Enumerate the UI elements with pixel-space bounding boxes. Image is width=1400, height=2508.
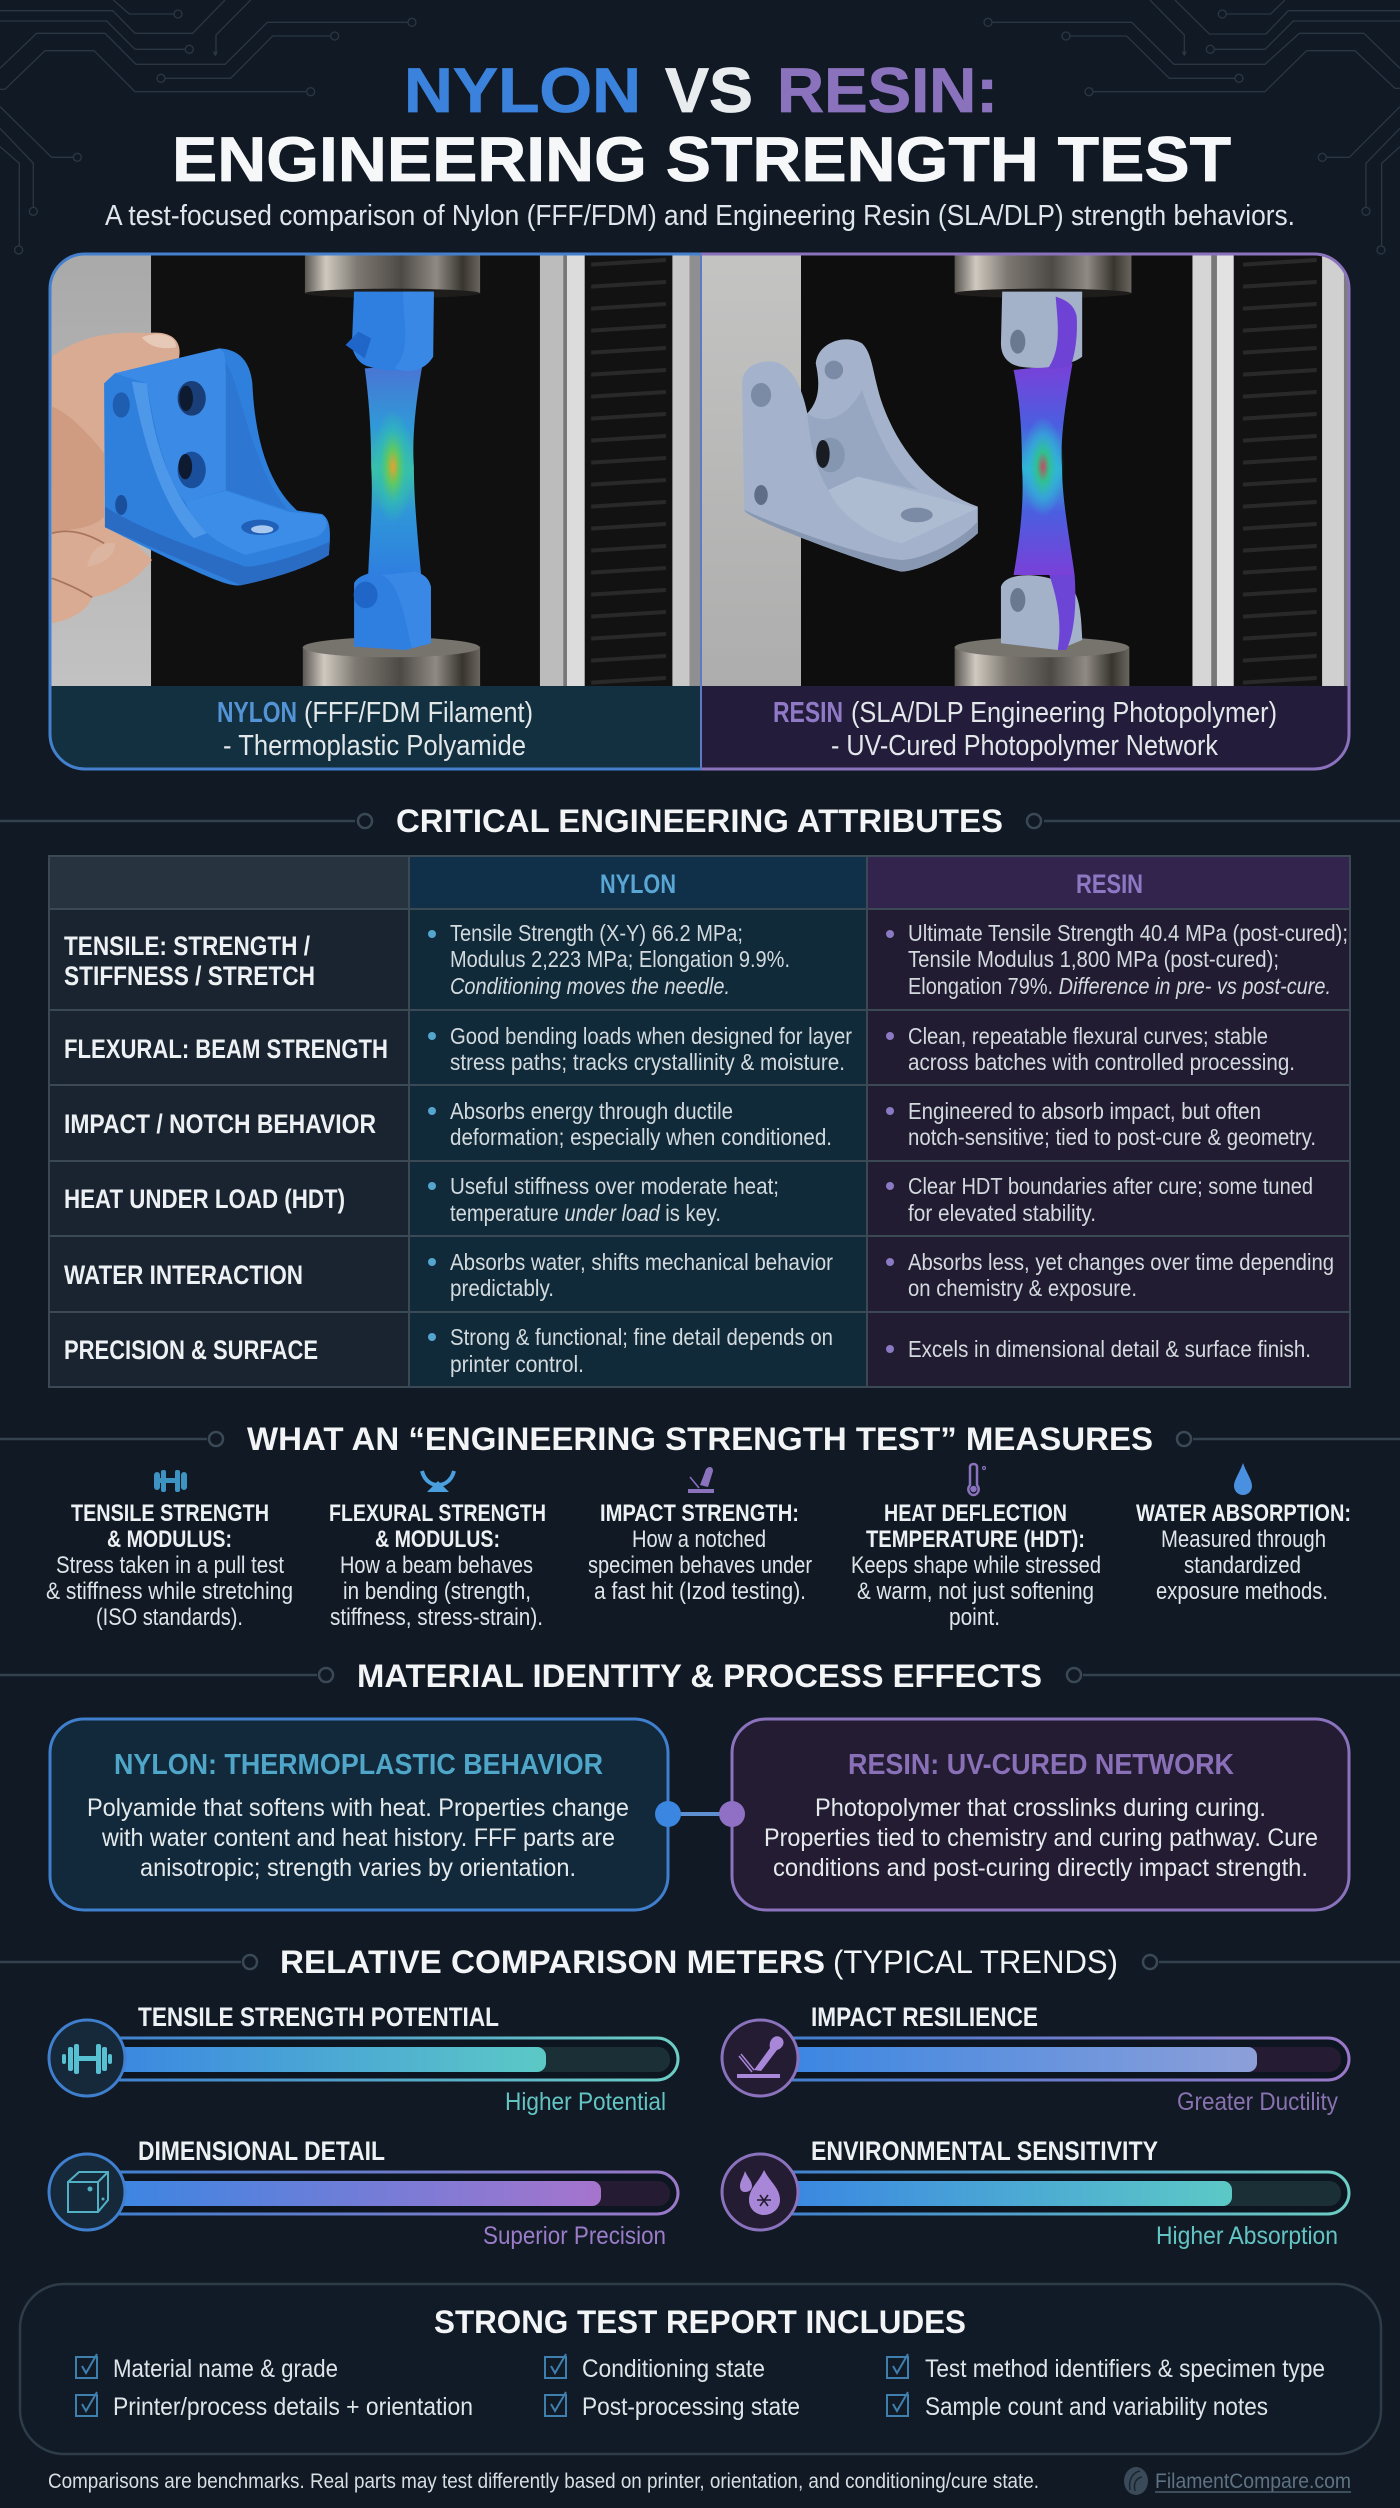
measure: flexural strength: in bending (strength,: [343, 1578, 531, 1605]
card: resin network: RESIN: UV-CURED NETWORK: [848, 1749, 1234, 1781]
panel outline: [50, 254, 1349, 769]
row: precision: PRECISION & SURFACE: [64, 1335, 318, 1365]
meter: dimensional detail: DIMENSIONAL DETAIL: [138, 2136, 385, 2166]
meter: environmental sensitivity: [722, 2136, 1349, 2250]
checklist: column 2: Conditioning state: [582, 2355, 765, 2383]
measure: flexural strength: & MODULUS:: [375, 1526, 500, 1553]
row: heat: [64, 1173, 1313, 1226]
measure: impact strength: [588, 1467, 812, 1605]
measure: water absorption: Measured through: [1161, 1526, 1326, 1553]
title: NYLON: [404, 56, 641, 126]
caption: resin: RESIN: [773, 697, 843, 729]
footer brand: [1124, 2467, 1351, 2495]
icon: water drop: [1234, 1463, 1252, 1495]
panel: strong test report: [20, 2284, 1381, 2454]
heading: material identity: [0, 1658, 1400, 1694]
row: precision: Strong & functional; fine detail depends on: [450, 1324, 833, 1350]
measure: heat deflection temperature: Keeps shape while stressed: [851, 1552, 1101, 1579]
checklist: column 3: [887, 2354, 1325, 2421]
caption: nylon: (FFF/FDM Filament): [304, 697, 533, 729]
measure: tensile strength: TENSILE STRENGTH: [71, 1500, 269, 1527]
row: flexural: Good bending loads when designed for layer: [450, 1023, 852, 1049]
meter: tensile strength potential: [49, 2002, 678, 2116]
meter: dimensional detail: [49, 2136, 678, 2250]
row: tensile: Tensile Modulus 1,800 MPa (post-cured);: [908, 946, 1279, 972]
caption: nylon: NYLON: [217, 697, 297, 729]
row: impact: deformation; especially when conditioned.: [450, 1124, 832, 1150]
row: flexural: FLEXURAL: BEAM STRENGTH: [64, 1034, 388, 1064]
meter: environmental sensitivity: ENVIRONMENTAL SENSITIVITY: [811, 2136, 1158, 2166]
measure: water absorption: standardized: [1184, 1552, 1301, 1579]
measure: tensile strength: (ISO standards).: [96, 1604, 243, 1631]
row: heat: Clear HDT boundaries after cure; some tuned: [908, 1173, 1313, 1199]
measure: flexural strength: How a beam behaves: [340, 1552, 533, 1579]
row: heat: HEAT UNDER LOAD (HDT): [64, 1184, 345, 1214]
measure: heat deflection temperature: [851, 1464, 1101, 1631]
row: tensile: Elongation 79%. Difference in pre- vs post-cure.: [908, 973, 1331, 999]
row: tensile: Modulus 2,223 MPa; Elongation 9.9%.: [450, 946, 790, 972]
caption: nylon: [217, 697, 533, 762]
row: flexural: [64, 1023, 1295, 1075]
caption: resin: - UV-Cured Photopolymer Network: [831, 730, 1218, 762]
row: impact: IMPACT / NOTCH BEHAVIOR: [64, 1109, 376, 1139]
row: flexural: stress paths; tracks crystallinity & moisture.: [450, 1049, 845, 1075]
photo: resin bracket and tensile specimen: [700, 250, 1352, 687]
meter: impact resilience: Greater Ductility: [1177, 2088, 1338, 2116]
card: nylon behavior: NYLON: THERMOPLASTIC BEHAVIOR: [114, 1749, 603, 1781]
measure: flexural strength: [329, 1471, 546, 1631]
circuit traces: top left: [0, 0, 416, 254]
measure: tensile strength: [46, 1470, 293, 1631]
measure: tensile strength: & stiffness while stretching: [46, 1578, 293, 1605]
row: precision: Excels in dimensional detail & surface finish.: [908, 1336, 1311, 1362]
row: water: Absorbs water, shifts mechanical behavior: [450, 1249, 833, 1275]
icon: impact hammer: [688, 1467, 714, 1493]
row: precision: [64, 1324, 1311, 1377]
panel: strong test report: STRONG TEST REPORT INCLUDES: [434, 2304, 966, 2340]
icon: dumbbell arrow: [154, 1470, 187, 1492]
card: resin network: conditions and post-curing directly impact strength.: [773, 1854, 1308, 1882]
meter: tensile strength potential: TENSILE STRENGTH POTENTIAL: [138, 2002, 499, 2032]
icon: cube: [49, 2154, 125, 2230]
caption backgrounds: [49, 686, 1350, 770]
measure: impact strength: IMPACT STRENGTH:: [600, 1500, 799, 1527]
measure: heat deflection temperature: TEMPERATURE (HDT):: [866, 1526, 1085, 1553]
card: resin network: Photopolymer that crosslinks during curing.: [815, 1794, 1266, 1822]
row: tensile: TENSILE: STRENGTH /: [64, 931, 310, 961]
measure: impact strength: How a notched: [632, 1526, 766, 1553]
measure: flexural strength: stiffness, stress-strain).: [330, 1604, 543, 1631]
icon: dumbbell: [49, 2020, 125, 2096]
row: precision: printer control.: [450, 1351, 584, 1377]
heading: relative comparison meters: [0, 1944, 1400, 1980]
meter: environmental sensitivity: Higher Absorption: [1156, 2222, 1338, 2250]
photo: nylon bracket and tensile specimen: [40, 250, 702, 687]
caption: resin: [773, 697, 1277, 762]
row: water: on chemistry & exposure.: [908, 1275, 1137, 1301]
heading: critical engineering attributes: CRITICAL ENGINEERING ATTRIBUTES: [396, 803, 1003, 839]
checklist: column 1: [76, 2354, 473, 2421]
caption: resin: (SLA/DLP Engineering Photopolymer): [851, 697, 1277, 729]
measure: tensile strength: Stress taken in a pull test: [56, 1552, 284, 1579]
card: nylon behavior: anisotropic; strength varies by orientation.: [140, 1854, 576, 1882]
caption: nylon: - Thermoplastic Polyamide: [223, 730, 526, 762]
panel: material photos: [40, 250, 1352, 770]
card: nylon behavior: with water content and heat history. FFF parts are: [101, 1824, 615, 1852]
table: engineering attributes: [49, 856, 1350, 1387]
table header: nylon: NYLON: [600, 869, 676, 899]
row: impact: Engineered to absorb impact, but often: [908, 1098, 1261, 1124]
checklist: column 1: Printer/process details + orientation: [113, 2393, 473, 2421]
meter: impact resilience: [722, 2002, 1349, 2116]
circuit traces: top right: [984, 0, 1400, 254]
heading: relative comparison meters: RELATIVE COMPARISON METERS: [280, 1944, 825, 1980]
table header: resin: RESIN: [1076, 869, 1143, 899]
row: water: [64, 1249, 1334, 1301]
measure: water absorption: WATER ABSORPTION:: [1136, 1500, 1351, 1527]
row: tensile: Conditioning moves the needle.: [450, 973, 730, 999]
card: nylon behavior: [50, 1719, 668, 1910]
row: flexural: Clean, repeatable flexural curves; stable: [908, 1023, 1268, 1049]
icon: beam bend: [422, 1471, 454, 1492]
row: heat: for elevated stability.: [908, 1200, 1096, 1226]
row: impact: [64, 1098, 1316, 1150]
row: flexural: across batches with controlled processing.: [908, 1049, 1295, 1075]
heading: critical engineering attributes: [0, 803, 1400, 839]
card: resin network: Properties tied to chemistry and curing pathway. Cure: [764, 1824, 1318, 1852]
measure: heat deflection temperature: & warm, not just softening: [857, 1578, 1094, 1605]
heading: what the test measures: [0, 1421, 1400, 1457]
row: impact: notch-sensitive; tied to post-cure & geometry.: [908, 1124, 1316, 1150]
row: heat: temperature under load is key.: [450, 1200, 721, 1226]
footer disclaimer: Comparisons are benchmarks. Real parts may test differently based on printer, orientation, and conditioning/cure state.: [48, 2470, 1039, 2493]
title: VS: [665, 56, 753, 126]
measure: impact strength: a fast hit (Izod testing).: [594, 1578, 806, 1605]
meter: impact resilience: IMPACT RESILIENCE: [811, 2002, 1038, 2032]
measure: water absorption: [1136, 1463, 1351, 1605]
row: impact: Absorbs energy through ductile: [450, 1098, 733, 1124]
connector between cards: [655, 1801, 745, 1827]
measure: water absorption: exposure methods.: [1156, 1578, 1328, 1605]
title: ENGINEERING STRENGTH TEST: [172, 125, 1231, 195]
row: heat: Useful stiffness over moderate heat;: [450, 1173, 779, 1199]
card: resin network: [732, 1719, 1349, 1910]
checklist: column 3: Test method identifiers & specimen type: [925, 2355, 1325, 2383]
row: tensile: Tensile Strength (X-Y) 66.2 MPa;: [450, 920, 743, 946]
heading: what the test measures: WHAT AN “ENGINEERING STRENGTH TEST” MEASURES: [247, 1421, 1153, 1457]
measure: tensile strength: & MODULUS:: [107, 1526, 232, 1553]
row: water: WATER INTERACTION: [64, 1260, 303, 1290]
checklist: column 2: [545, 2354, 800, 2421]
meter: tensile strength potential: Higher Potential: [505, 2088, 666, 2116]
measure: flexural strength: FLEXURAL STRENGTH: [329, 1500, 546, 1527]
card: nylon behavior: Polyamide that softens with heat. Properties change: [87, 1794, 629, 1822]
checklist: column 3: Sample count and variability notes: [925, 2393, 1268, 2421]
icon: impact hammer: [722, 2020, 798, 2096]
subtitle: A test-focused comparison of Nylon (FFF/FDM) and Engineering Resin (SLA/DLP) strength behaviors.: [105, 200, 1295, 232]
footer brand: FilamentCompare.com: [1155, 2470, 1351, 2493]
row: water: predictably.: [450, 1275, 554, 1301]
icon: water drops: [722, 2154, 798, 2230]
heading: material identity: MATERIAL IDENTITY & PROCESS EFFECTS: [357, 1658, 1042, 1694]
measure: heat deflection temperature: HEAT DEFLECTION: [884, 1500, 1067, 1527]
title: RESIN:: [777, 56, 998, 126]
heading: relative comparison meters: (TYPICAL TRENDS): [833, 1944, 1118, 1980]
meter: dimensional detail: Superior Precision: [483, 2222, 666, 2250]
row: tensile: STIFFNESS / STRETCH: [64, 961, 315, 991]
measure: heat deflection temperature: point.: [949, 1604, 1000, 1631]
icon: thermometer: [968, 1464, 986, 1495]
measure: impact strength: specimen behaves under: [588, 1552, 812, 1579]
row: tensile: Ultimate Tensile Strength 40.4 MPa (post-cured);: [908, 920, 1348, 946]
row: water: Absorbs less, yet changes over time depending: [908, 1249, 1334, 1275]
row: tensile: [64, 920, 1348, 999]
title: [172, 56, 1231, 195]
checklist: column 2: Post-processing state: [582, 2393, 800, 2421]
checklist: column 1: Material name & grade: [113, 2355, 338, 2383]
